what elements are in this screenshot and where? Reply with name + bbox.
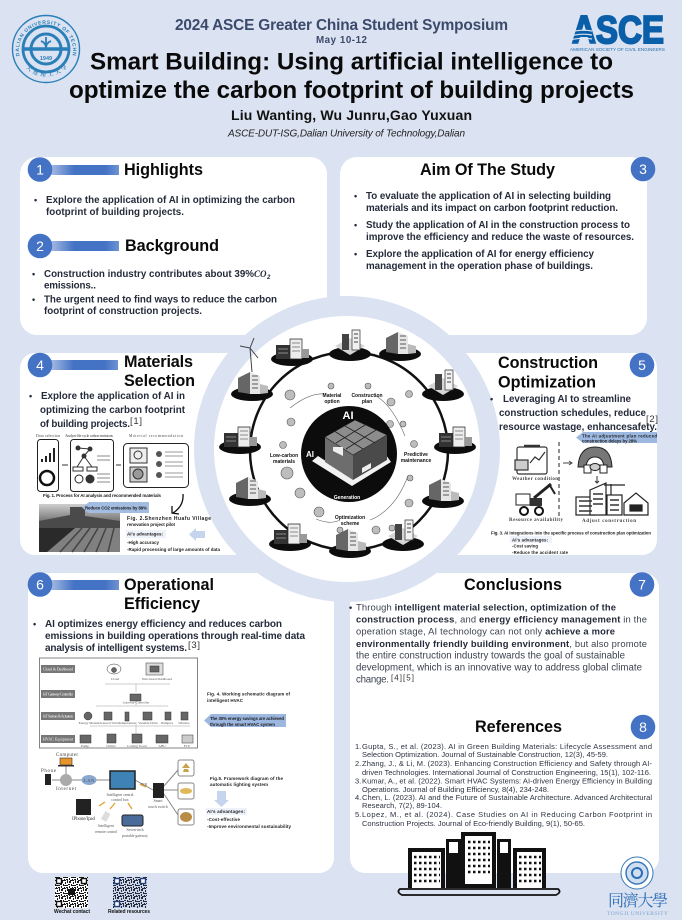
figure 5: lighting system network: Seven-inch: [126, 828, 144, 832]
reference list: Gupta, S., et al. (2023). AI in Green Building Materials: Lifecycle Assessment and: [362, 742, 652, 751]
ring of buildings: [219, 330, 476, 558]
ASCE logo: ASCE: [572, 9, 664, 52]
heading: materials selection: Materials: [124, 353, 193, 371]
reference list: 1.: [355, 742, 361, 751]
badge 7: [630, 572, 654, 597]
advantages text: AI's advantages:: [207, 809, 246, 814]
Tongji University logo: TONGJI UNIVERSITY: [607, 911, 668, 917]
construction text: resource wastage, enhancesafety.: [499, 422, 657, 433]
badge 3: 3: [639, 161, 647, 177]
diagram labels: plan: [362, 399, 372, 405]
callout: adjustment plan: The AI adjustment plan reduced: [582, 434, 657, 438]
callout: energy savings: The 30% energy savings are achieved: [210, 716, 284, 721]
figure 4: HVAC schematic: AHU: [158, 744, 166, 748]
badge 2: 2: [36, 238, 44, 254]
background text: CO: [254, 269, 267, 279]
conclusions text: [4][5]: [391, 674, 414, 682]
date: May 10-12: [316, 35, 368, 46]
reference list: 4.: [355, 793, 361, 802]
central circular diagram: [194, 296, 500, 602]
figure 5: lighting system network: Computer: [56, 753, 78, 758]
operational text: [3]: [188, 640, 200, 651]
operational text: •: [33, 619, 36, 629]
operational text: AI optimizes energy efficiency and reduces carbon: [45, 619, 282, 630]
highlights text: •: [34, 195, 37, 205]
diagram labels: Construction: [351, 393, 383, 399]
main title: Smart Building: Using artificial intelligence to: [90, 48, 613, 76]
figure 5: lighting system network: Intelligent: [98, 824, 115, 828]
advantages text: -Cost-effective: [207, 817, 240, 822]
callout: energy savings: through the smart HVAC system: [210, 722, 275, 727]
figure 4: HVAC schematic: IoT Gateway Controller: [43, 692, 74, 696]
figure 4: HVAC schematic: HVAC Equipment: [43, 738, 74, 742]
background text: 2: [266, 275, 271, 281]
figure 5: lighting system network: LAN: [84, 778, 94, 783]
badge 8: 8: [639, 719, 647, 735]
arrow: left block: [189, 528, 205, 541]
panel: aim of the study: [354, 157, 655, 272]
panel: references: [355, 715, 655, 895]
figure 5: lighting system network: Smart: [153, 799, 163, 803]
conclusions text: development, which is an innovative way to address global climate: [356, 662, 642, 674]
heading: background: Background: [125, 237, 219, 255]
callout: adjustment plan: [576, 432, 657, 443]
heading: operational efficiency: Operational: [124, 576, 214, 594]
figure 4: HVAC schematic: Dampers: [161, 721, 174, 725]
badge 2: [28, 234, 119, 258]
panel: conclusions: [349, 572, 654, 686]
conclusions text: [349, 602, 647, 686]
callout: reduce CO2: [82, 502, 149, 513]
aim bullets: •: [354, 249, 357, 259]
background text: Construction industry contributes about 39%: [44, 269, 254, 280]
figure 4: HVAC schematic: [40, 658, 198, 748]
Tongji University logo: 同濟大學: [608, 891, 668, 910]
reference list: Construction Projects. Journal of Eco-friendly Building, 9(1), 50-65.: [362, 819, 585, 828]
figure 2 caption and advantages: renovation project pilot: [127, 522, 176, 527]
ASCE logo: AMERICAN SOCIETY OF CIVIL ENGINEERS: [570, 47, 665, 53]
figure 3 caption and advantages: -Reduce the accident rate: [512, 550, 569, 555]
AI building core: AI: [306, 450, 314, 459]
reference list: 5.: [355, 810, 361, 819]
reference list: driven Technologies. International Journal of Construction Engineering, 15(1), 102-116.: [362, 768, 651, 777]
AI building core: Generation: [334, 495, 360, 501]
aim bullets: Explore the application of AI for energy efficiency: [366, 249, 595, 260]
photo: Shenzhen Huafu Village: [39, 504, 120, 552]
badge 8: [631, 715, 655, 739]
badge 5: [630, 353, 654, 377]
callout: reduce CO2: Reduce CO2 emissions by 89%: [85, 506, 147, 510]
figure 2 caption and advantages: -High accuracy: [127, 540, 159, 545]
small process icons: [280, 383, 418, 534]
heading: construction optimization: [498, 354, 598, 392]
curved arrow: [172, 494, 183, 514]
figure 3 caption and advantages: Fig. 3. AI integrations into the specific process of construction plan optimization: [491, 531, 651, 536]
QR code: related resources: Related resources: [108, 909, 150, 915]
callout: energy savings: [204, 714, 286, 727]
authors: Liu Wanting, Wu Junru,Gao Yuxuan: [231, 107, 472, 123]
panel: materials selection: [28, 353, 220, 552]
figure 4: HVAC schematic: Advanced Valve: [97, 721, 120, 725]
badge 4: 4: [36, 357, 44, 373]
conclusions text: Through intelligent material selection, optimization of the: [356, 602, 616, 613]
arrow: to adjustment: [563, 461, 572, 465]
badge 7: 7: [638, 576, 646, 592]
figure 5: lighting system network: remote control: [95, 830, 117, 834]
aim bullets: materials and its impact on carbon footprint reduction.: [366, 203, 618, 214]
main title: [69, 48, 634, 104]
icon: AI gear helmet: [578, 447, 612, 473]
header: [12, 9, 665, 140]
figure 5 caption: [210, 776, 283, 787]
heading: materials selection: Selection: [124, 372, 195, 390]
figure 2 caption and advantages: AI's advantages:: [127, 532, 164, 537]
figure 4: HVAC schematic: Cloud: [111, 677, 119, 681]
conclusions text: construction process, and energy efficiency management in the: [356, 614, 647, 625]
figure 4: HVAC schematic: Variable Drive: [138, 721, 158, 725]
figure 1: AI analysis flow: Fig. 1. Process for AI analysis and recommended materials: [43, 493, 161, 498]
heading: highlights: Highlights: [124, 161, 203, 179]
figure 2 caption and advantages: [126, 516, 220, 552]
diagram labels: option: [324, 399, 340, 405]
panel: background: [28, 234, 277, 317]
figure 5: lighting system network: Phone: [41, 769, 57, 774]
panel: highlights: [28, 157, 295, 218]
diagram labels: [270, 393, 431, 527]
background text: footprint of construction projects.: [44, 306, 202, 317]
diagram labels: Optimization: [335, 515, 365, 521]
operational text: emissions in building operations through real-time data: [45, 631, 305, 642]
heading: aim: Aim Of The Study: [420, 161, 555, 179]
materials text: optimizing the carbon footprint: [40, 405, 186, 416]
figure 5 caption: automatic lighting system: [210, 782, 268, 787]
aim bullets: improve the efficiency and reduce the waste of resources.: [366, 232, 634, 243]
figure 4: HVAC schematic: Chiller: [106, 744, 117, 748]
figure 4: HVAC schematic: Gateway Controller: [123, 700, 150, 704]
aim bullets: [354, 191, 634, 272]
advantages text: [206, 808, 291, 829]
operational text: analysis of intelligent systems.: [45, 643, 187, 654]
figure 3 caption and advantages: AI's advantages:: [512, 537, 549, 542]
background text: [32, 269, 277, 317]
figure 2 caption and advantages: -Rapid processing of large amounts of data: [127, 547, 220, 552]
materials text: [29, 391, 186, 430]
figure 5: lighting system network: touch switch: [148, 805, 168, 809]
reference list: 3.: [355, 777, 361, 786]
main title: optimize the carbon footprint of building projects: [69, 77, 634, 104]
conclusions text: environmentally friendly building environment, but also promote: [356, 638, 647, 649]
figure 4: HVAC schematic: IoT Sensors & Actuators: [43, 714, 74, 718]
badge 1: [28, 157, 119, 182]
icon: weather clipboard: [515, 446, 547, 474]
figure 4: HVAC schematic: Window: [178, 721, 190, 725]
reference list: Zhang, J., & Li, M. (2023). Enhancing Construction Efficiency and Safety through AI-: [362, 759, 652, 768]
aim bullets: management in the operation phase of buildings.: [366, 261, 593, 272]
figure 3 caption and advantages: -Cost saving: [512, 544, 538, 548]
highlights text: Explore the application of AI in optimizing the carbon: [46, 195, 295, 206]
figure 5: lighting system network: portable gateway: [122, 834, 148, 838]
university seal: 大连理工大学: [26, 64, 66, 77]
diagram labels: Predictive: [404, 452, 428, 458]
diagram labels: maintenance: [401, 458, 431, 464]
figure 4: HVAC schematic: Pump: [81, 744, 89, 748]
badge 6: 6: [36, 576, 44, 592]
diagram labels: scheme: [341, 521, 360, 527]
construction text: construction schedules, reduce: [499, 408, 647, 419]
materials text: •: [29, 391, 32, 401]
reference list: 2.: [355, 759, 361, 768]
affiliation: ASCE-DUT-ISG,Dalian University of Technology,Dalian: [227, 128, 465, 140]
figure 1: AI analysis flow: Material recommendation: [129, 434, 183, 438]
illustration: city buildings: [398, 832, 560, 895]
reference list: Lopez, M., et al. (2024). Case Studies on AI in Reducing Carbon Footprint in: [362, 810, 652, 819]
background text: •: [32, 269, 35, 279]
figure 2 caption and advantages: Fig. 2.Shenzhen Huafu Village: [127, 516, 211, 522]
conclusions text: operation stage, AI technology can not only achieve a more: [356, 626, 615, 637]
reference list: Operations. Journal of Building Efficiency, 8(4), 234-248.: [362, 785, 549, 794]
heading: materials selection: [124, 353, 195, 390]
background text: The urgent need to find ways to reduce the carbon: [44, 295, 277, 306]
figure 5: lighting system network: control box: [111, 798, 129, 802]
heading: operational efficiency: Efficiency: [124, 595, 200, 613]
Tongji University logo: [607, 857, 668, 917]
conclusions text: the entire construction industry towards the goal of sustainable: [356, 650, 625, 662]
construction text: [490, 394, 658, 433]
heading: references: References: [475, 718, 562, 736]
figure 4: HVAC schematic: FCU: [184, 744, 191, 748]
diagram labels: Low-carbon: [270, 453, 298, 459]
figure 5: lighting system network: [41, 753, 194, 838]
construction text: Leveraging AI to streamline: [503, 394, 632, 405]
figure 1: AI analysis flow: [36, 434, 188, 498]
diagram labels: materials: [273, 459, 295, 465]
badge 5: 5: [638, 357, 646, 373]
operational text: [33, 619, 305, 654]
reference list: Selection Optimization. Journal of Sustainable Construction, 12(3), 45-59.: [362, 750, 608, 759]
figure 4 caption: [207, 692, 290, 703]
figure 4 caption: Fig. 4. Working schematic diagram of: [207, 692, 290, 697]
callout: adjustment plan: construction delays by 28%: [582, 438, 637, 443]
figure 4 caption: intelligent HVAC: [207, 698, 244, 703]
AI building core: [301, 406, 397, 502]
icon: adjusted buildings: [576, 483, 648, 515]
heading: operational efficiency: [124, 576, 214, 613]
figure 3 caption and advantages: [491, 531, 651, 555]
figure 3: construction plan workflow: Weather condition: [512, 477, 558, 482]
figure 1: AI analysis flow: Analyze life cycle carbon emissions: [65, 434, 114, 438]
arrow: down block: [214, 791, 229, 807]
figure 4: HVAC schematic: Web-based Dashboard: [142, 677, 173, 681]
reference list: Kumar, A., et al. (2022). Smart HVAC Systems: AI-driven Energy Efficiency in Building: [362, 777, 652, 786]
university seal: 1949: [40, 56, 52, 62]
figure 5: lighting system network: EIB: [141, 783, 148, 787]
figure 5 caption: Fig.5. Framework diagram of the: [210, 776, 283, 781]
reference list: Research, 7(2), 89-104.: [362, 801, 442, 810]
highlights text: [34, 195, 295, 218]
aim bullets: Study the application of AI in the construction process to: [366, 220, 630, 231]
figure 3: construction plan workflow: [509, 442, 648, 524]
heading: construction optimization: Construction: [498, 354, 598, 372]
heading: conclusions: Conclusions: [464, 576, 562, 594]
panel backgrounds: [20, 157, 659, 873]
QR code: related resources: [108, 877, 150, 915]
advantages text: -Improve environmental sustainability: [207, 824, 291, 829]
icon: excavator: [516, 484, 555, 515]
badge 1: 1: [36, 162, 44, 178]
badge 3: [631, 157, 655, 181]
figure 5: lighting system network: Internet: [56, 787, 77, 792]
figure 5: lighting system network: Intelligent central: [107, 793, 133, 797]
background text: •: [32, 295, 35, 305]
symposium title: 2024 ASCE Greater China Student Symposium: [175, 17, 508, 34]
figure 4: HVAC schematic: Temperature: [118, 721, 136, 725]
aim bullets: •: [354, 220, 357, 230]
figure 4: HVAC schematic: Energy Meter: [79, 721, 98, 725]
conclusions text: •: [349, 603, 352, 613]
badge 4: [28, 353, 118, 377]
QR code: WeChat contact: [54, 877, 90, 915]
arrow: down: [595, 476, 599, 483]
AI building core: AI: [342, 410, 354, 422]
conclusions text: change.: [356, 674, 389, 686]
university seal: [12, 14, 80, 84]
figure 4: HVAC schematic: Cloud & Dashboard: [43, 668, 73, 672]
background text: emissions..: [44, 281, 96, 292]
figure 4: HVAC schematic: Cooling Tower: [127, 744, 148, 748]
badge 6: [28, 572, 119, 597]
heading: construction optimization: Optimization: [498, 374, 596, 392]
highlights text: footprint of building projects.: [46, 207, 184, 218]
aim bullets: To evaluate the application of AI in selecting building: [366, 191, 611, 202]
reference list: Chen, L. (2023). AI and the Future of Sustainable Architecture. Advanced Architectural: [362, 793, 652, 802]
panel: construction optimization: [490, 353, 658, 555]
construction text: •: [490, 394, 493, 404]
diagram labels: Material: [323, 393, 342, 399]
reference list: [355, 742, 652, 828]
materials text: [1]: [130, 416, 142, 427]
construction text: [2]: [646, 414, 658, 425]
materials text: of building projects.: [40, 419, 130, 430]
aim bullets: •: [354, 191, 357, 201]
figure 3: construction plan workflow: Resource availability: [509, 518, 564, 523]
panel: operational efficiency: [28, 572, 305, 838]
figure 5: lighting system network: IPhone/Ipad: [72, 817, 96, 822]
figure 3: construction plan workflow: Adjust construction: [582, 519, 636, 524]
QR code: WeChat contact: Wechat contact: [54, 909, 90, 915]
materials text: Explore the application of AI in: [41, 391, 185, 402]
figure 1: AI analysis flow: Data selection: [36, 434, 60, 438]
